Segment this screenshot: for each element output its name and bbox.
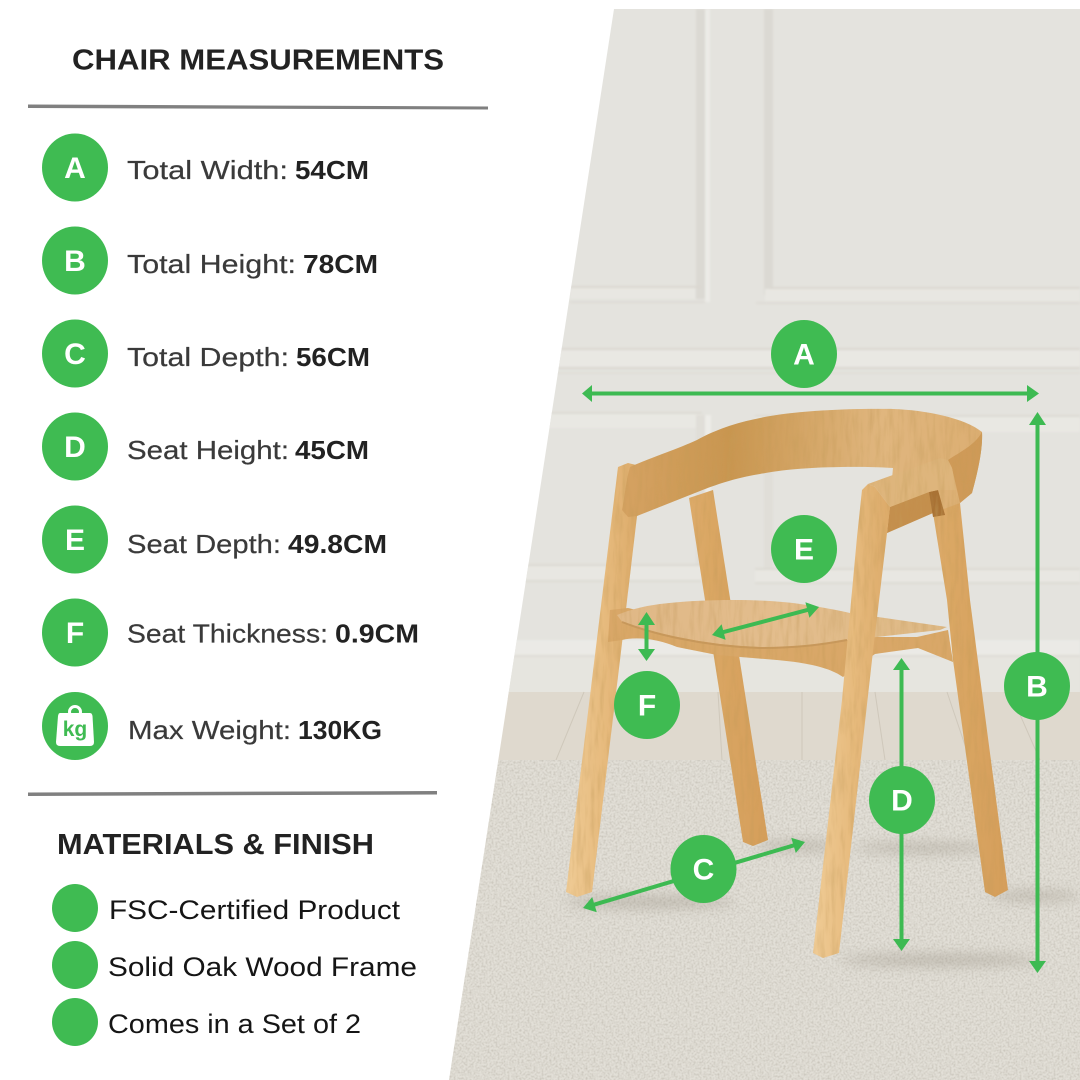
carpet <box>440 760 1080 1080</box>
arrow B with badge: B <box>1026 670 1048 704</box>
backrest <box>622 409 982 533</box>
list item: FSC certified: FSC-Certified Product <box>109 895 401 925</box>
row: seat thickness: 0.9CM <box>335 618 419 648</box>
row: total height: B <box>64 245 86 278</box>
wall panel mouldings <box>514 10 774 657</box>
shadow under right arm <box>887 492 933 533</box>
row: total height: Total Height: <box>127 249 296 279</box>
list item: set of 2: Comes in a Set of 2 <box>108 1009 361 1039</box>
wall background <box>508 9 1080 696</box>
photo: room with chair <box>440 9 1080 1080</box>
row: total depth <box>42 320 370 388</box>
row: max weight: Max Weight: <box>128 715 291 745</box>
row: total width: Total Width: <box>127 155 288 185</box>
row: total depth: C <box>64 338 86 371</box>
seat <box>617 600 947 647</box>
list item: solid oak: Solid Oak Wood Frame <box>108 952 417 982</box>
arrow C with badge: C <box>693 854 714 886</box>
list item: solid oak <box>52 941 417 989</box>
row: max weight <box>42 692 382 760</box>
divider: lower <box>28 791 437 796</box>
divider: top <box>28 104 488 110</box>
icon: weight with kg <box>56 706 94 746</box>
arrow F with badge <box>614 612 680 739</box>
arrow A with badge <box>582 320 1039 402</box>
row: total depth: 56CM <box>296 342 370 372</box>
front right leg <box>813 484 890 958</box>
row: total width <box>42 134 369 202</box>
arrow D with badge <box>869 658 935 951</box>
arrow E with badge: E <box>794 534 814 566</box>
row: seat depth: E <box>65 524 85 557</box>
rear left leg <box>689 490 768 846</box>
heading: materials and finish: MATERIALS & FINISH <box>57 829 374 861</box>
arrow E with badge <box>712 515 837 640</box>
list item: set of 2 <box>52 998 361 1046</box>
list item: FSC certified <box>52 884 401 932</box>
rear right arm slot <box>929 490 945 517</box>
row: seat height: 45CM <box>295 435 369 465</box>
row: seat depth <box>42 506 387 574</box>
row: seat thickness <box>42 598 419 666</box>
row: total width: 54CM <box>295 155 369 185</box>
row: total height <box>42 226 378 294</box>
front left leg <box>566 463 640 897</box>
seat front edge <box>622 622 847 648</box>
row: seat thickness: Seat Thickness: <box>127 618 328 648</box>
title: chair measurements: CHAIR MEASUREMENTS <box>72 44 444 76</box>
seat frame <box>608 608 953 677</box>
row: seat height <box>42 412 369 480</box>
wood floor <box>440 692 1080 762</box>
row: total depth: Total Depth: <box>127 342 289 372</box>
outer shell of backrest <box>948 432 982 503</box>
chair <box>566 409 1008 958</box>
row: seat depth: 49.8CM <box>288 529 387 559</box>
row: max weight: 130KG <box>298 715 382 745</box>
row: total width: A <box>64 152 86 185</box>
right arm top <box>868 464 952 507</box>
arrow F with badge: F <box>638 690 656 722</box>
row: seat height: Seat Height: <box>127 435 289 465</box>
arrow A with badge: A <box>793 338 815 372</box>
rear right leg <box>933 468 1008 897</box>
arrow D with badge: D <box>891 784 913 818</box>
row: total height: 78CM <box>303 249 378 279</box>
row: seat depth: Seat Depth: <box>127 529 281 559</box>
arrow B with badge <box>1004 412 1070 973</box>
chair shadows on carpet <box>565 841 1080 966</box>
row: seat height: D <box>64 431 86 464</box>
row: seat thickness: F <box>66 617 84 650</box>
icon: weight with kg: kg <box>63 718 87 741</box>
arrow C with badge <box>583 835 805 912</box>
